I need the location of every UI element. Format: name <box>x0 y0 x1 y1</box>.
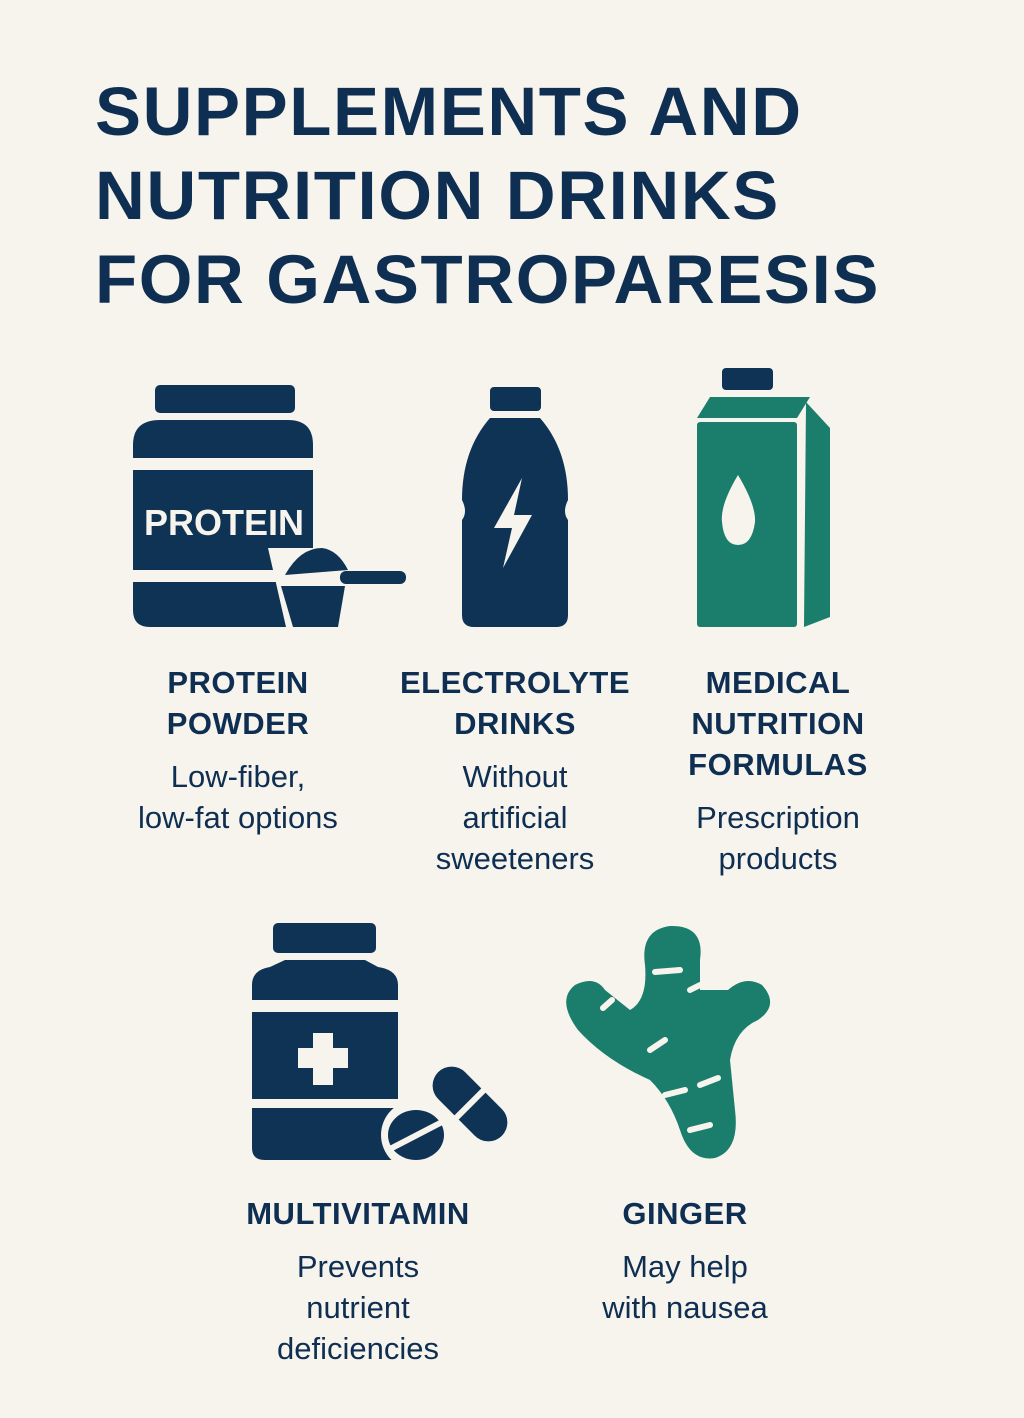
label: ginger <box>602 1196 768 1325</box>
label: electrolyte drinks <box>400 665 630 876</box>
label: medical nutrition formulas: MEDICAL <box>706 665 850 700</box>
icon: ginger <box>566 926 770 1158</box>
label: medical nutrition formulas <box>688 665 868 876</box>
label: multivitamin: Prevents <box>297 1249 419 1284</box>
title: NUTRITION DRINKS <box>95 157 780 234</box>
label: electrolyte drinks: ELECTROLYTE <box>400 665 630 700</box>
label: electrolyte drinks: DRINKS <box>454 706 576 741</box>
label: multivitamin <box>246 1196 470 1366</box>
label: protein powder: PROTEIN <box>167 665 309 700</box>
label: electrolyte drinks: artificial <box>462 800 568 835</box>
icon: electrolyte bottle <box>462 387 568 627</box>
title <box>95 73 880 318</box>
title: FOR GASTROPARESIS <box>95 241 880 318</box>
label: ginger: GINGER <box>622 1196 748 1231</box>
label: multivitamin: deficiencies <box>277 1331 439 1366</box>
icon: protein jar <box>133 385 406 627</box>
icon: multivitamin bottle <box>252 923 517 1170</box>
label: ginger: with nausea <box>602 1290 768 1325</box>
label: ginger: May help <box>622 1249 748 1284</box>
label: electrolyte drinks: sweeteners <box>436 841 594 876</box>
label: medical nutrition formulas: Prescription <box>696 800 860 835</box>
label: protein powder <box>138 665 338 835</box>
label: protein powder: POWDER <box>167 706 309 741</box>
label: medical nutrition formulas: products <box>719 841 837 876</box>
label: medical nutrition formulas: FORMULAS <box>688 747 868 782</box>
label: protein powder: Low-fiber, <box>171 759 305 794</box>
label: multivitamin: MULTIVITAMIN <box>246 1196 470 1231</box>
label: medical nutrition formulas: NUTRITION <box>691 706 865 741</box>
label: electrolyte drinks: Without <box>462 759 568 794</box>
label: multivitamin: nutrient <box>306 1290 410 1325</box>
icon: nutrition carton <box>697 368 830 627</box>
icon: protein jar: PROTEIN <box>144 502 304 543</box>
title: SUPPLEMENTS AND <box>95 73 803 150</box>
label: protein powder: low-fat options <box>138 800 338 835</box>
